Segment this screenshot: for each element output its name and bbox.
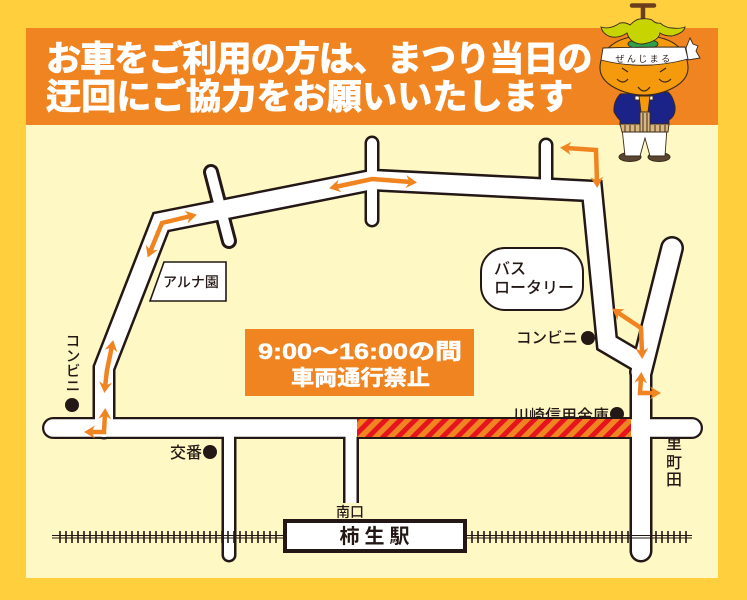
arrow: upper left corner: [150, 216, 191, 252]
label: police box: 交番: [170, 444, 202, 462]
label: town name: 田: [666, 472, 682, 489]
road outlines: [53, 143, 692, 555]
mascot stem: [632, 6, 654, 22]
mascot sandals: [619, 152, 670, 162]
mascot calyx: [628, 39, 658, 49]
detour arrows: [90, 148, 655, 432]
mascot jacket: [614, 92, 675, 125]
station building: [285, 521, 465, 551]
mascot leaves: [601, 19, 685, 44]
headband name: ぜんじまる: [615, 54, 673, 64]
mascot face: [617, 68, 671, 91]
mascot headband: [601, 38, 700, 65]
arrow: left junction: [90, 414, 105, 432]
arrow: right junction: [640, 378, 655, 393]
mascot head: [600, 36, 688, 95]
station name: 柿生駅: [340, 525, 414, 548]
label: Kawasaki Shinkin Bank: 川崎信用金庫: [513, 407, 609, 425]
closure note: 車両通行禁止: [291, 367, 430, 390]
label: convenience store right: コンビニ: [516, 329, 578, 347]
arrow: left road: [105, 346, 112, 387]
header line 2: 迂回にご協力をお願いいたします: [46, 78, 573, 117]
label: Aruna-en: アルナ園: [163, 274, 219, 290]
label: Aruna-en: [150, 262, 226, 301]
label: convenience store left: コンビニ: [64, 333, 80, 393]
callout: closure time: [245, 329, 474, 396]
arrow: right fork: [617, 312, 642, 353]
label: bus rotary: [481, 248, 583, 310]
label: bus rotary: ロータリー: [494, 279, 574, 297]
arrow: top centre: [335, 179, 411, 187]
label: bus rotary: バス: [494, 261, 526, 278]
road network: [53, 143, 692, 555]
road fills: [53, 143, 692, 555]
mascot: [600, 6, 700, 162]
closed road section: [357, 419, 631, 437]
railway: [52, 531, 692, 543]
header banner: [26, 28, 718, 125]
label: police box: [170, 444, 217, 462]
label: town name: 里: [666, 435, 682, 453]
mascot legs: [622, 128, 667, 156]
label: south exit: 南口: [336, 504, 364, 520]
label: town name: 町: [666, 455, 682, 472]
arrow: top right: [566, 148, 597, 182]
mascot hakama: [620, 112, 669, 132]
header line 1: お車をご利用の方は、まつり当日の: [46, 40, 592, 79]
mascot collar and hands: [635, 96, 653, 112]
closure hours: 9:00～16:00の間: [258, 339, 462, 364]
